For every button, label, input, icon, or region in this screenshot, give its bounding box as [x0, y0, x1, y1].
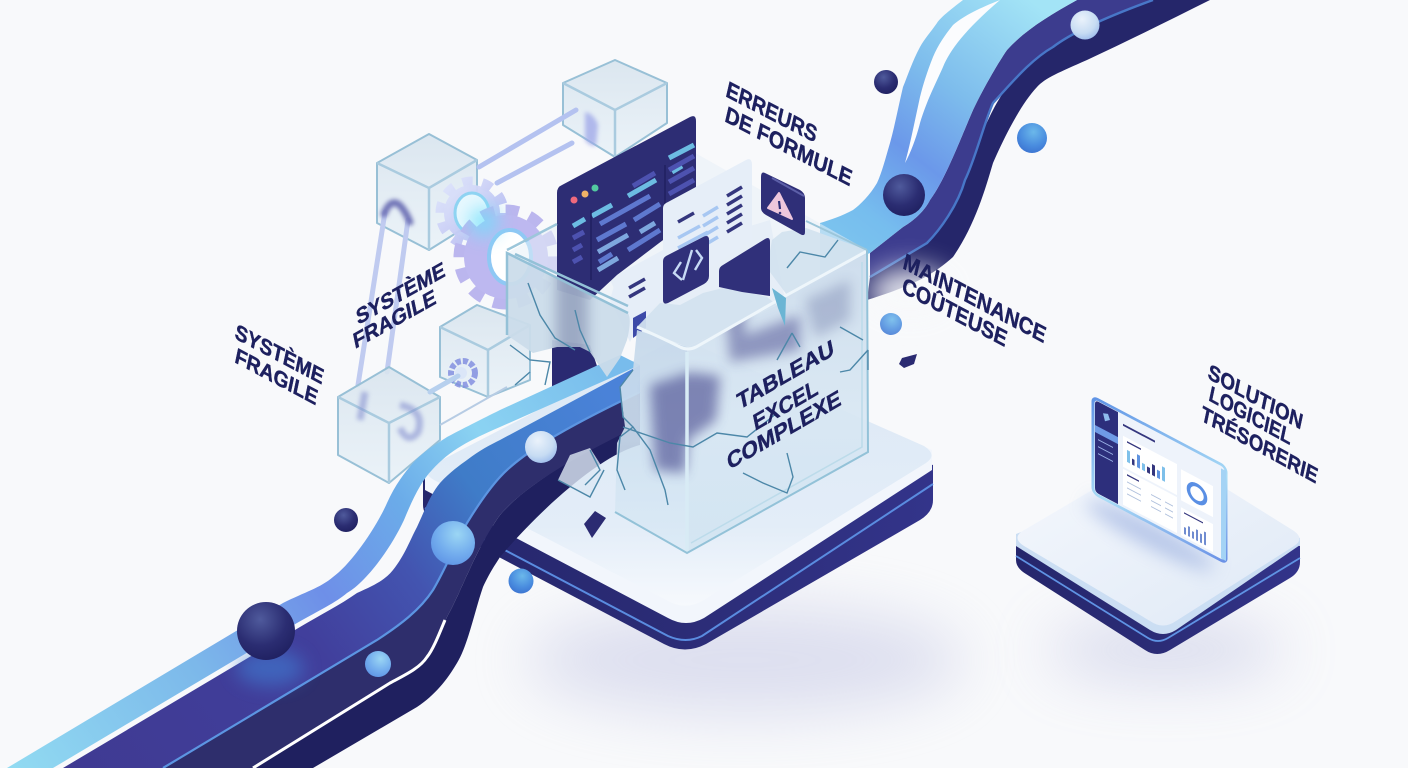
- dashboard header bar: [1123, 425, 1155, 442]
- rim highlights: [637, 251, 867, 349]
- glass cube: middle with gear: [440, 305, 530, 397]
- label: maintenance coûteuse: COÛTEUSE: [900, 272, 1010, 353]
- label: système fragile left: SYSTÈME: [233, 318, 326, 389]
- alert icon: [761, 172, 805, 235]
- dashboard sidebar: [1095, 400, 1118, 504]
- label: solution logiciel trésorerie: SOLUTION: [1206, 359, 1305, 434]
- upper left shard: [507, 224, 630, 377]
- label: tableau excel complexe: EXCEL: [751, 375, 820, 436]
- table card: [1123, 469, 1177, 533]
- glass cube: left with belt: [377, 134, 477, 250]
- label: maintenance coûteuse: MAINTENANCE: [901, 249, 1048, 349]
- label: système fragile on cubes: SYSTÈME: [354, 256, 447, 329]
- donut card: [1181, 469, 1213, 517]
- platform shadows: [525, 605, 1285, 715]
- shard fragments: [584, 354, 917, 538]
- small solution platform: [1016, 453, 1300, 654]
- label: erreurs de formule: [723, 77, 854, 192]
- inner frosted backing: [610, 220, 785, 348]
- mini chart card: [1181, 507, 1213, 552]
- back of the glass block: [507, 150, 867, 350]
- label: système fragile on cubes: FRAGILE: [351, 284, 438, 353]
- gears with glow: [441, 182, 552, 303]
- bar chart card: [1123, 436, 1177, 495]
- dashboard screen: [1093, 397, 1226, 563]
- label: solution logiciel trésorerie: [1199, 359, 1320, 488]
- glass cube: lower left with gear: [338, 367, 507, 483]
- label: tableau excel complexe: COMPLEXE: [725, 386, 843, 475]
- label: tableau excel complexe: TABLEAU: [735, 336, 836, 415]
- front top surface: [637, 287, 777, 347]
- label: erreurs de formule: ERREURS: [724, 77, 819, 148]
- belts between cubes: [358, 110, 576, 385]
- label: solution logiciel trésorerie: LOGICIEL: [1207, 381, 1294, 450]
- code window: [557, 116, 696, 300]
- document panel: [610, 159, 752, 342]
- glass cube: top right with gear: [563, 60, 667, 157]
- broken glass block: [507, 221, 868, 553]
- label: solution logiciel trésorerie: TRÉSORERIE: [1199, 400, 1320, 488]
- top right shard: [767, 228, 867, 295]
- code icon: [663, 236, 709, 304]
- lower data ribbon: [7, 355, 640, 768]
- right face: [687, 252, 868, 553]
- blurred contents seen through glass: [650, 280, 850, 473]
- floating spheres: [237, 10, 1100, 677]
- bottom left fragment: [558, 448, 604, 497]
- label: tableau excel complexe: [725, 336, 843, 475]
- second dark tile: [719, 238, 770, 296]
- upper data ribbon: [820, 0, 1210, 316]
- navy gap behind broken glass: [552, 340, 600, 395]
- crack lines: [510, 240, 868, 505]
- left lower piece: [615, 330, 687, 553]
- label: erreurs de formule: DE FORMULE: [723, 102, 854, 192]
- main platform: [423, 340, 933, 650]
- cyan fracture wedge: [772, 288, 786, 326]
- label: système fragile left: FRAGILE: [233, 343, 320, 410]
